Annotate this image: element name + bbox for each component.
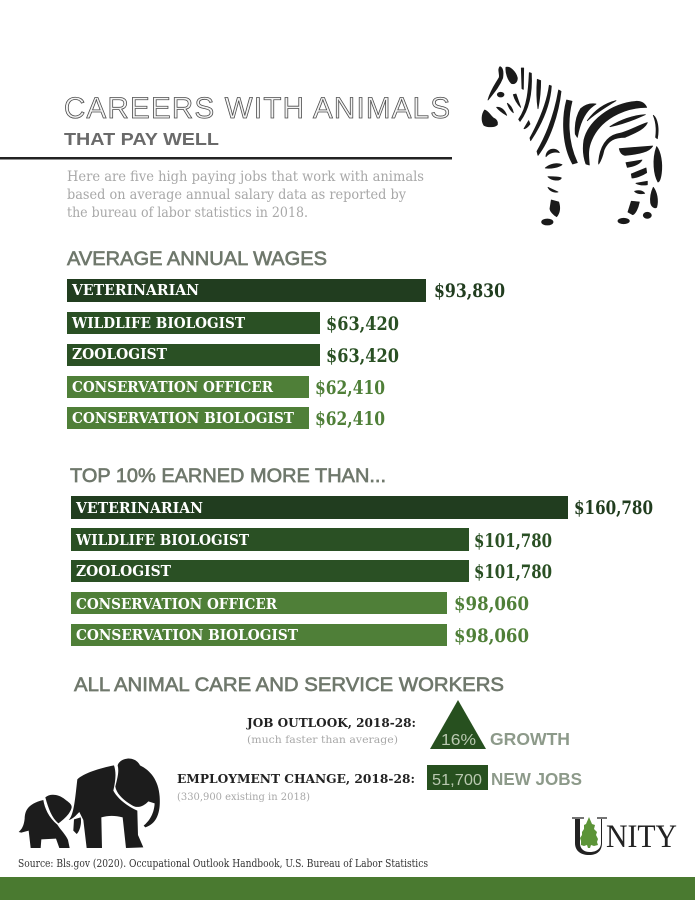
bar: zoologist (71, 560, 552, 583)
intro text (67, 169, 424, 221)
icon: pine tree (580, 817, 598, 848)
bar: wildlife biologist (67, 312, 399, 335)
logo: Unity: NITY (606, 819, 677, 855)
logo letter U (575, 819, 602, 855)
source note: Source: Bls.gov (2020). Occupational Outlook Handbook, U.S. Bureau of Labor Statistics (18, 857, 428, 870)
bar: veterinarian (67, 279, 505, 302)
icon: elephants (19, 759, 160, 848)
stat: employment change: NEW JOBS (491, 769, 582, 789)
bar: conservation officer: $62,410 (315, 378, 385, 399)
bar: wildlife biologist: WILDLIFE BIOLOGIST (71, 315, 245, 332)
section heading: all animal care: ALL ANIMAL CARE AND SERVICE WORKERS (74, 674, 504, 696)
intro text: Here are five high paying jobs that work with animals (67, 169, 424, 185)
bar: veterinarian (71, 496, 653, 519)
section heading: top 10%: TOP 10% EARNED MORE THAN... (70, 465, 386, 487)
stat: employment change: 51,700 (432, 772, 482, 789)
bar: conservation biologist: $62,410 (315, 409, 385, 430)
bar: conservation biologist (71, 624, 529, 647)
bar: zoologist (67, 344, 399, 367)
bar: zoologist: $63,420 (326, 346, 399, 367)
subtitle: THAT PAY WELL (64, 129, 219, 149)
bar: veterinarian: $93,830 (434, 281, 505, 302)
bar: wildlife biologist (71, 528, 552, 552)
bar: conservation biologist (67, 407, 385, 430)
icon: growth triangle (430, 700, 486, 749)
bar: wildlife biologist: $101,780 (474, 531, 552, 552)
stat: job outlook: (much faster than average) (247, 734, 398, 746)
bar: conservation biologist: CONSERVATION BIOLOGIST (72, 410, 294, 427)
stat: employment change (177, 765, 582, 803)
icon: zebra (482, 67, 662, 225)
stat: employment change: EMPLOYMENT CHANGE, 2018-28: (177, 771, 415, 786)
stat: job outlook: GROWTH (490, 729, 570, 749)
intro text: based on average annual salary data as reported by (67, 187, 406, 203)
bar: conservation officer: $98,060 (454, 594, 529, 615)
bar: conservation officer: CONSERVATION OFFICER (72, 379, 274, 396)
bar: veterinarian: VETERINARIAN (75, 500, 203, 517)
stat: job outlook: 16% (441, 732, 476, 749)
bar: conservation officer (67, 376, 385, 399)
footer band (0, 877, 695, 900)
bar chart: average annual wages (67, 279, 505, 430)
bar: veterinarian: $160,780 (574, 498, 653, 519)
bar: zoologist: $101,780 (474, 562, 552, 583)
bar: wildlife biologist: WILDLIFE BIOLOGIST (75, 532, 249, 549)
bar chart: top 10% earned (71, 496, 653, 647)
stat: job outlook: JOB OUTLOOK, 2018-28: (246, 715, 416, 730)
bar: conservation officer (71, 592, 529, 615)
intro text: the bureau of labor statistics in 2018. (67, 205, 308, 221)
bar: veterinarian: VETERINARIAN (71, 282, 199, 299)
bar: zoologist: ZOOLOGIST (76, 563, 171, 580)
logo: Unity (572, 817, 677, 855)
bar: conservation biologist: CONSERVATION BIOLOGIST (76, 627, 298, 644)
title: CAREERS WITH ANIMALS (64, 92, 450, 125)
bar: conservation officer: CONSERVATION OFFICER (76, 596, 278, 613)
bar: zoologist: ZOOLOGIST (72, 346, 167, 363)
bar: conservation biologist: $98,060 (454, 626, 529, 647)
bar: wildlife biologist: $63,420 (326, 314, 399, 335)
section heading: average annual wages: AVERAGE ANNUAL WAGES (67, 248, 327, 270)
stat: job outlook (246, 700, 570, 749)
stat: employment change: (330,900 existing in 2018) (177, 791, 310, 803)
